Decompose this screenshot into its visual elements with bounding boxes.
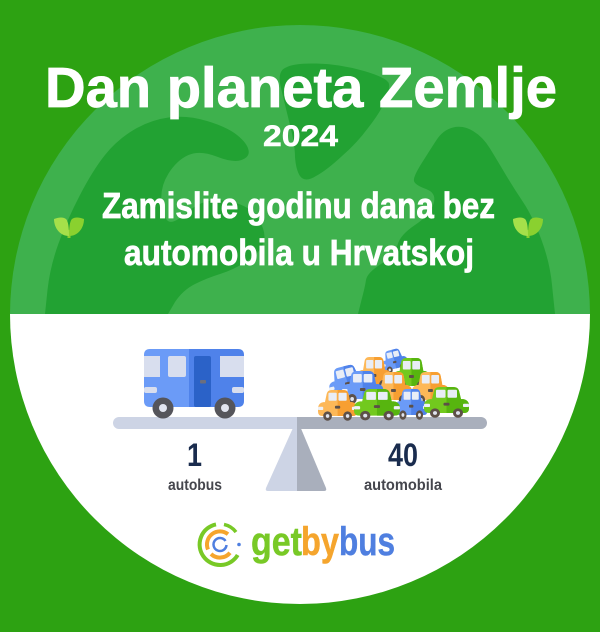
subtitle: automobila u Hrvatskoj	[124, 232, 474, 273]
logo wordmark: get	[251, 520, 302, 564]
logo wordmark: by	[301, 520, 340, 564]
icon: pile of cars	[318, 347, 469, 421]
label: 1 autobus	[168, 437, 222, 494]
label: 40 automobila: 40	[388, 437, 418, 473]
label: 40 automobila	[364, 437, 442, 494]
icon: right leaf	[513, 218, 543, 238]
label: 1 autobus: 1	[187, 437, 202, 473]
icon: bus	[144, 349, 244, 418]
globe: upper half	[10, 25, 590, 314]
logo wordmark	[251, 520, 395, 564]
label: 1 autobus: autobus	[168, 477, 222, 494]
icon: left leaf	[54, 218, 84, 238]
continent: right	[358, 127, 555, 314]
white lower half of globe	[10, 314, 590, 604]
subtitle: Zamislite godinu dana bez	[102, 185, 495, 226]
title: Dan planeta Zemlje	[45, 56, 557, 120]
logo wordmark: bus	[339, 520, 395, 564]
year: 2024	[263, 120, 338, 153]
continent: left	[45, 117, 265, 314]
logo: getbybus	[200, 520, 395, 565]
seesaw scale	[113, 417, 487, 491]
label: 40 automobila: automobila	[364, 477, 442, 494]
continent: top centre	[280, 63, 389, 180]
icon: logo rings	[200, 524, 241, 565]
subtitle	[102, 185, 495, 273]
